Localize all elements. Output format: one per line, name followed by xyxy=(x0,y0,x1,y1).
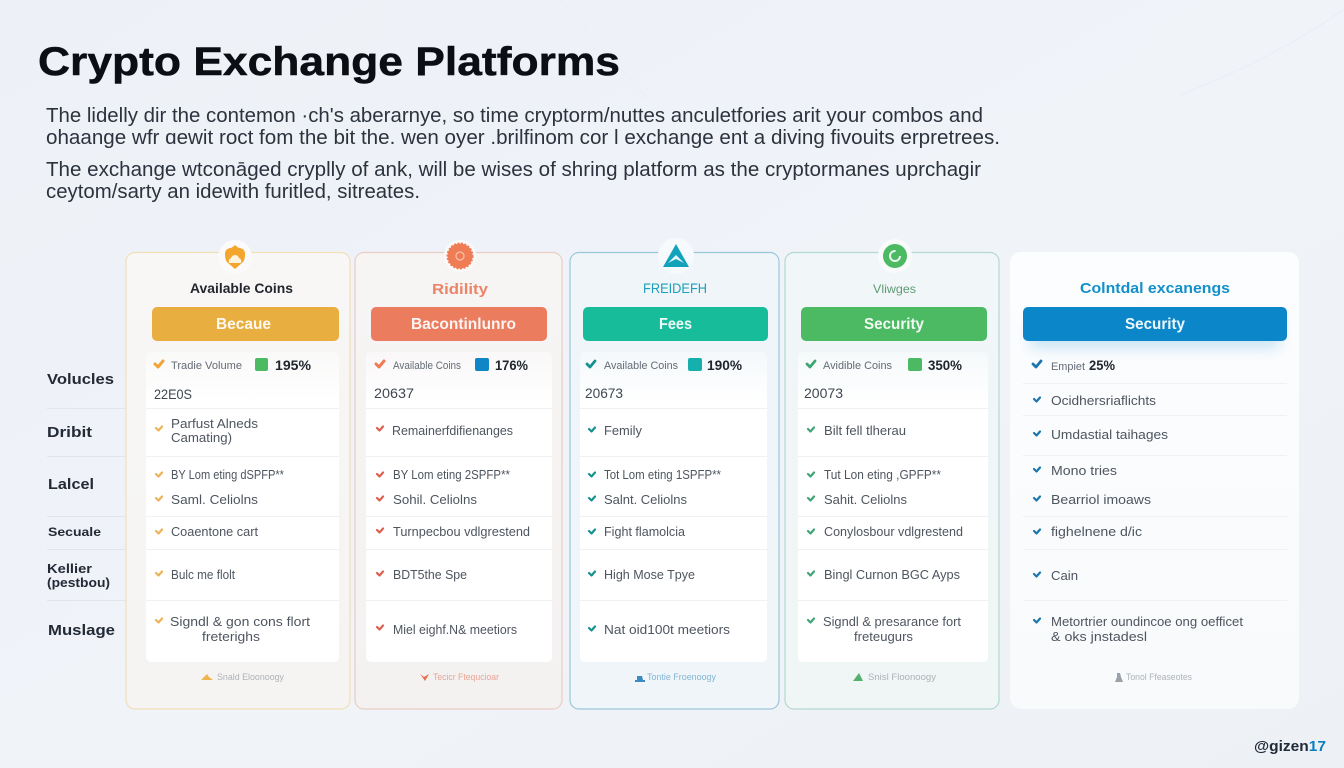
footer note: Tonol Ffeaseotes xyxy=(1126,672,1192,683)
content list: Ocidhersriaflichts xyxy=(1051,393,1157,408)
content list: 20073 xyxy=(804,386,843,401)
content list: Femily xyxy=(604,423,642,438)
intro text block: The lidelly dir the contemon ·ch's aberarnye, so time cryptorm/nuttes anculetfories arit your combos and xyxy=(46,105,983,127)
content list: Available Coins xyxy=(604,360,678,372)
content list: Coaentone cart xyxy=(171,524,258,539)
content list: 176% xyxy=(495,358,528,373)
content list: freteugurs xyxy=(854,629,913,644)
content list: High Mose Tpye xyxy=(604,567,695,582)
content list: Parfust Alneds xyxy=(171,416,259,431)
content list: Signdl & presarance fort xyxy=(823,614,961,629)
content list: BY Lom eting dSPFP** xyxy=(171,467,284,482)
footer note: Snald Eloonoogy xyxy=(217,672,284,683)
intro text block: ohaange wfr ɑewit roct fom the bit the. wen oyer .brilfinom cor l exchange ent a diving fivouits erpretrees. xyxy=(46,127,1000,149)
icon: amber bell xyxy=(218,240,252,274)
content list: fighelnene d/ic xyxy=(1051,524,1143,539)
header button xyxy=(801,307,987,341)
heading: Available Coins xyxy=(190,280,293,296)
header button: Becaue xyxy=(216,316,271,333)
content list: & oks jnstadesl xyxy=(1051,629,1147,644)
panel: card 5 blue xyxy=(1010,252,1299,709)
content list: Bearriol imoaws xyxy=(1051,492,1152,507)
row labels column: Volucles xyxy=(47,371,114,388)
content list: Bingl Curnon BGC Ayps xyxy=(824,567,960,582)
content list: Umdastial taihages xyxy=(1051,427,1169,442)
heading: Vliwges xyxy=(873,282,916,296)
header button: Security xyxy=(864,316,924,333)
panel: card 2 coral xyxy=(355,240,562,709)
footer note: Tontie Froenoogy xyxy=(647,672,716,683)
intro text block xyxy=(46,105,1000,203)
icon: coral sun xyxy=(444,240,476,272)
content list: 22E0S xyxy=(154,387,192,402)
title: Crypto Exchange Platforms xyxy=(38,40,620,84)
content list: 195% xyxy=(275,358,311,373)
content list: Miel eighf.N& meetiors xyxy=(393,622,517,637)
content list xyxy=(146,352,339,662)
content list: Cain xyxy=(1051,568,1078,583)
heading: Colntdal excanengs xyxy=(1080,280,1230,297)
content list: freterighs xyxy=(202,629,261,644)
panel: card 4 green xyxy=(785,239,999,709)
footer note: Tecicr Ftequcioar xyxy=(433,672,499,683)
content list: 190% xyxy=(707,358,742,373)
content list xyxy=(366,352,552,662)
content list: Avidible Coins xyxy=(823,360,892,372)
content list: Camating) xyxy=(171,430,232,445)
header button xyxy=(1023,307,1287,348)
row labels column: Muslage xyxy=(48,622,115,639)
intro text block: The exchange wtconāged cryplly of ank, will be wises of shring platform as the cryptormanes uprchagir xyxy=(46,159,981,181)
row labels column: Dribit xyxy=(47,424,92,441)
content list xyxy=(1023,358,1287,644)
content list: Mono tries xyxy=(1051,463,1118,478)
row labels column: Secuale xyxy=(48,525,101,539)
panel: card 1 amber xyxy=(126,240,350,709)
content list: Conylosbour vdlgrestend xyxy=(824,524,963,539)
heading: FREIDEFH xyxy=(643,280,707,296)
content list: Tot Lom eting 1SPFP** xyxy=(604,467,721,482)
panel: card 3 teal xyxy=(570,238,779,709)
content list: Remainerfdifienanges xyxy=(392,423,513,438)
content list: Tradie Volume xyxy=(171,360,242,372)
content list: Nat oid100t meetiors xyxy=(604,622,731,637)
content list: Bilt fell tlherau xyxy=(824,423,906,438)
header button xyxy=(371,307,547,341)
content list: 20673 xyxy=(585,386,623,401)
header button: Security xyxy=(1125,316,1185,333)
row labels column: Lalcel xyxy=(48,476,94,493)
content list: BY Lom eting 2SPFP** xyxy=(393,467,510,482)
content list: 350% xyxy=(928,358,962,373)
content list: Sahit. Celiolns xyxy=(824,492,907,507)
header button xyxy=(583,307,768,341)
content list: Signdl & gon cons flort xyxy=(170,614,310,629)
content list: 20637 xyxy=(374,386,414,401)
content list: Fight flamolcia xyxy=(604,524,686,539)
heading: Ridility xyxy=(432,281,489,298)
intro text block: ceytom/sarty an idewith furitled, sitreates. xyxy=(46,181,420,203)
content list: Empiet xyxy=(1051,361,1085,373)
content list: Bulc me flolt xyxy=(171,567,235,582)
content list: Metortrier oundincoe ong oefficet xyxy=(1051,614,1243,629)
row labels column xyxy=(47,371,126,639)
content list: 25% xyxy=(1089,358,1115,373)
row labels column: (pestbou) xyxy=(47,575,110,590)
content list: Turnpecbou vdlgrestend xyxy=(393,524,530,539)
content list xyxy=(798,352,988,662)
icon: green ring xyxy=(878,239,912,273)
content list: Tut Lon eting ,GPFP** xyxy=(824,467,941,482)
content list: Saml. Celiolns xyxy=(171,492,259,507)
header button: Bacontinlunro xyxy=(411,316,516,333)
content list: Salnt. Celiolns xyxy=(604,492,687,507)
content list: BDT5the Spe xyxy=(393,567,467,582)
content list xyxy=(580,352,767,662)
header button xyxy=(152,307,339,341)
header button: Fees xyxy=(659,316,692,333)
icon: teal triangle xyxy=(658,238,694,274)
row labels column: Kellier xyxy=(47,561,92,576)
footer note: Snisl Floonoogy xyxy=(868,672,936,683)
content list: Available Coins xyxy=(393,360,461,372)
content list: Sohil. Celiolns xyxy=(393,492,478,507)
watermark: @gizen17 xyxy=(1254,738,1326,755)
